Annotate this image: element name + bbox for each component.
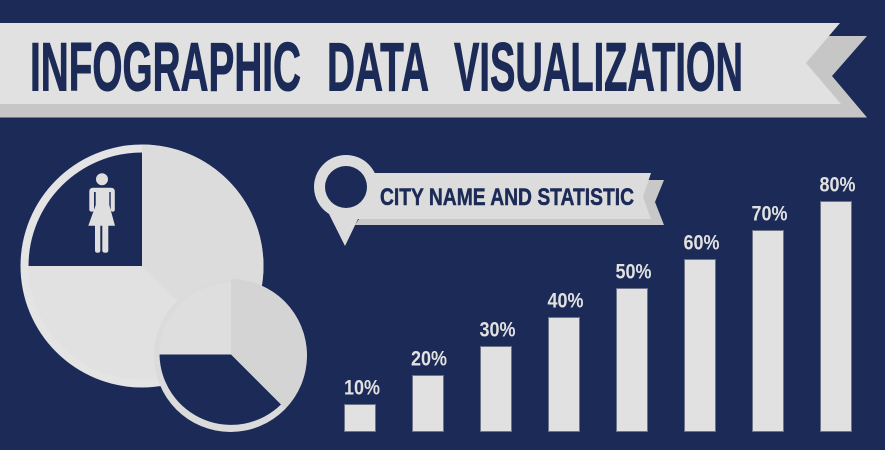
title (30, 28, 743, 106)
title: INFOGRAPHIC (30, 28, 301, 106)
bar 40%: 40% (548, 290, 584, 312)
bar 30% (480, 318, 516, 432)
bar chart (344, 174, 856, 432)
bar 60% (684, 232, 720, 432)
small pie chart (154, 279, 307, 432)
bar 50% (616, 260, 652, 432)
bar 80%: 80% (820, 174, 856, 196)
title ribbon (0, 23, 867, 118)
bar 20% (411, 348, 447, 432)
bar 80% (820, 174, 856, 432)
banner text: CITY NAME AND STATISTIC (380, 184, 634, 211)
bar 30%: 30% (480, 318, 516, 342)
bar 70%: 70% (752, 202, 788, 226)
bar 70% (752, 202, 788, 432)
bar 20%: 20% (411, 348, 447, 370)
bar 60%: 60% (684, 232, 720, 254)
icon: map pin (314, 155, 378, 246)
location banner (314, 155, 664, 246)
bar 10% (344, 376, 380, 432)
icon: woman (88, 173, 115, 253)
bar 10%: 10% (344, 376, 380, 400)
title: DATA (327, 28, 429, 106)
bar 50%: 50% (616, 260, 652, 284)
large pie chart (20, 144, 264, 388)
bar 40% (548, 290, 584, 432)
